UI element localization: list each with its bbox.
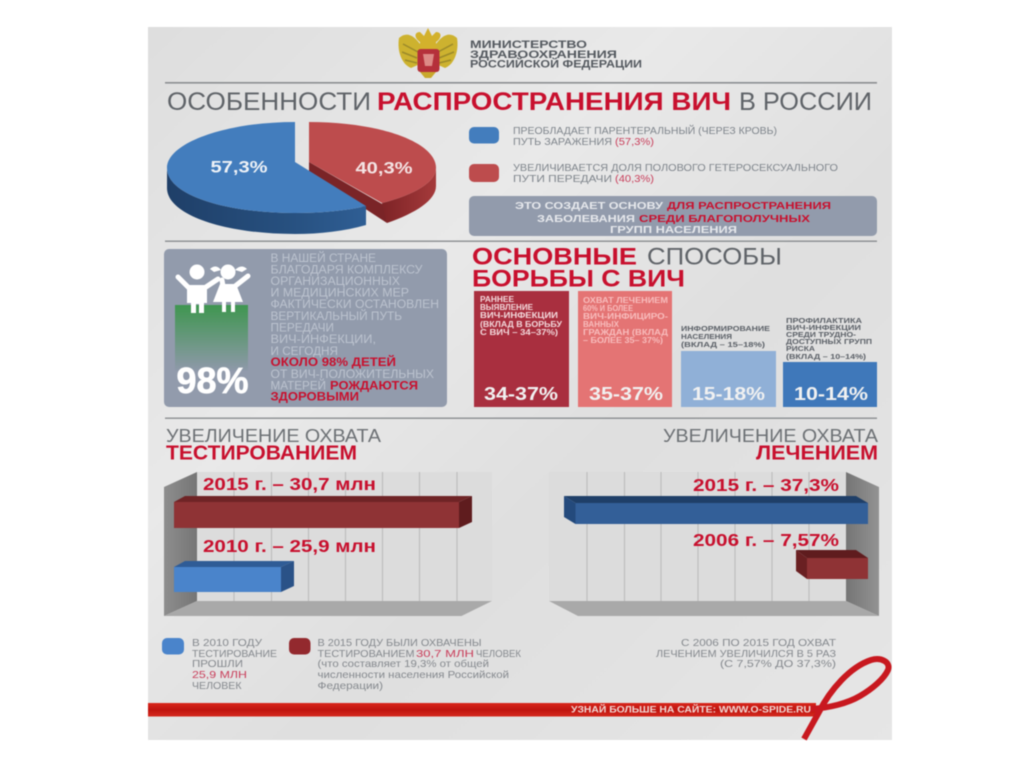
heading: testing coverage — [166, 425, 382, 464]
legend: blue: ПРЕОБЛАДАЕТ ПАРЕНТЕРАЛЬНЫЙ (ЧЕРЕЗ КРОВЬ) — [513, 124, 777, 137]
chart: treatment coverage — [549, 472, 879, 616]
legend: red: ПУТИ ПЕРЕДАЧИ — [513, 174, 612, 185]
bar: informing the public: НАСЕЛЕНИЯ — [681, 332, 732, 341]
note: 2015 testing — [289, 637, 522, 692]
bar: early detection — [474, 291, 569, 407]
heading: main ways of fighting HIV: ОСНОВНЫЕ — [472, 244, 637, 270]
panel text: И МЕДИЦИНСКИХ МЕР — [270, 288, 409, 300]
site link: УЗНАЙ БОЛЬШЕ НА САЙТЕ: WWW.O-SPIDE.RU — [571, 704, 811, 714]
bar: 2010 testing — [174, 561, 294, 592]
note: 2010 testing: ПРОШЛИ — [192, 658, 243, 670]
ministry name: РОССИЙСКОЙ ФЕДЕРАЦИИ — [470, 58, 642, 70]
ministry name: ЗДРАВООХРАНЕНИЯ — [470, 49, 617, 61]
heading: main ways of fighting HIV: БОРЬБЫ С ВИЧ — [472, 266, 685, 292]
bar: prevention — [783, 316, 877, 407]
panel text: ОКОЛО 98% ДЕТЕЙ — [270, 356, 396, 369]
icon: two children — [178, 264, 248, 313]
bar: prevention: ДОСТУПНЫХ ГРУПП — [786, 337, 872, 346]
legend: red — [469, 163, 838, 185]
callout: conclusion box: ЗАБОЛЕВАНИЯ — [537, 213, 635, 225]
legend: red: УВЕЛИЧИВАЕТСЯ ДОЛЯ ПОЛОВОГО ГЕТЕРОСЕКСУАЛЬНОГО — [513, 163, 838, 174]
bar: prevention: 10-14% — [794, 384, 868, 404]
heading: treatment coverage: УВЕЛИЧЕНИЕ ОХВАТА — [663, 425, 879, 446]
heading: main ways of fighting HIV — [472, 244, 782, 292]
panel text: И СЕГОДНЯ — [270, 346, 338, 358]
panel text: ЗДОРОВЫМИ — [270, 392, 359, 404]
bar: early detection: (ВКЛАД В БОРЬБУ — [480, 320, 563, 329]
panel: infographic background — [148, 27, 892, 740]
callout: conclusion box: ДЛЯ РАСПРОСТРАНЕНИЯ — [667, 200, 831, 212]
bar: early detection: 34-37% — [484, 384, 558, 404]
label: 57,3%: 57,3% — [210, 158, 268, 176]
panel text: В НАШЕЙ СТРАНЕ — [270, 252, 376, 265]
title — [167, 88, 872, 116]
bar: prevention: РИСКА — [786, 344, 816, 353]
callout: conclusion box: СРЕДИ БЛАГОПОЛУЧНЫХ — [639, 213, 810, 225]
bar: informing the public — [681, 324, 776, 407]
bar: treatment coverage: – БОЛЕЕ 35– 37%) — [583, 336, 663, 345]
note: treatment growth: ЛЕЧЕНИЕМ УВЕЛИЧИЛСЯ В 5 РАЗ — [656, 648, 836, 660]
label: 2015 testing: 2015 г. – 30,7 млн — [203, 474, 376, 494]
ministry name: МИНИСТЕРСТВО — [470, 39, 588, 51]
bar: treatment coverage — [578, 291, 672, 407]
note: 2010 testing: 25,9 МЛН — [192, 669, 247, 681]
legend: blue: ПУТЬ ЗАРАЖЕНИЯ — [513, 137, 612, 148]
note: 2010 testing: В 2010 ГОДУ — [192, 637, 262, 649]
bar: treatment coverage: ВИЧ-ИНФИЦИРО- — [583, 312, 668, 321]
note: 2010 testing — [162, 637, 277, 692]
bar: treatment coverage: ВАННЫХ — [583, 320, 620, 329]
title: В РОССИИ — [739, 88, 872, 116]
bar: treatment coverage: ГРАЖДАН (ВКЛАД — [583, 328, 668, 337]
pie chart — [167, 122, 436, 234]
bar: early detection: РАННЕЕ — [480, 295, 515, 304]
bar: prevention: ПРОФИЛАКТИКА — [786, 316, 863, 325]
legend: blue — [469, 124, 777, 148]
panel text: ОТ ВИЧ-ПОЛОЖИТЕЛЬНЫХ — [270, 369, 434, 381]
panel text: РОЖДАЮТСЯ — [330, 380, 418, 392]
callout: conclusion box: ГРУПП НАСЕЛЕНИЯ — [610, 224, 737, 236]
bar: prevention: (ВКЛАД – 10–14%) — [786, 352, 867, 361]
panel text: ВИЧ-ИНФЕКЦИИ, — [270, 334, 376, 346]
note: 2015 testing: Федерации) — [318, 680, 383, 692]
bar: 2015 testing — [174, 496, 472, 528]
label: 2010 testing: 2010 г. – 25,9 млн — [203, 536, 376, 556]
legend: red: (40,3%) — [615, 174, 654, 185]
panel text — [270, 252, 439, 404]
bar: informing the public: (ВКЛАД – 15–18%) — [681, 340, 766, 349]
bar: informing the public: ИНФОРМИРОВАНИЕ — [681, 324, 770, 333]
icon: state emblem — [398, 28, 458, 78]
label: 40,3%: 40,3% — [356, 158, 412, 178]
heading: treatment coverage — [663, 425, 879, 464]
heading: testing coverage: ТЕСТИРОВАНИЕМ — [166, 442, 357, 464]
panel text: МАТЕРЕЙ — [270, 380, 326, 392]
title: ОСОБЕННОСТИ — [167, 88, 371, 116]
icon: red ribbon with site link — [148, 659, 889, 739]
callout: conclusion box: ЭТО СОЗДАЕТ ОСНОВУ — [515, 200, 664, 212]
note: 2015 testing: В 2015 ГОДУ БЫЛИ ОХВАЧЕНЫ — [318, 637, 482, 649]
panel: 98% of children — [164, 249, 447, 407]
note: 2015 testing: (что составляет 19,3% от общей — [318, 658, 489, 670]
bar: treatment coverage: ОХВАТ ЛЕЧЕНИЕМ — [583, 296, 668, 305]
note: 2015 testing: ТЕСТИРОВАНИЕМ — [318, 648, 414, 660]
heading: treatment coverage: ЛЕЧЕНИЕМ — [756, 442, 878, 464]
98% figure: 98% — [176, 360, 248, 401]
legend: blue: (57,3%) — [615, 137, 654, 148]
bar: early detection: С ВИЧ – 34–37%) — [480, 328, 558, 337]
green gradient bar — [175, 305, 248, 371]
note: treatment growth — [656, 637, 837, 670]
callout: conclusion box — [469, 196, 877, 236]
bar: treatment coverage: 35-37% — [589, 384, 663, 404]
panel text: ФАКТИЧЕСКИ ОСТАНОВЛЕН — [270, 299, 439, 311]
panel text: БЛАГОДАРЯ КОМПЛЕКСУ — [270, 264, 423, 276]
panel text: ПЕРЕДАЧИ — [270, 322, 334, 334]
label: 2015 treatment: 2015 г. – 37,3% — [693, 475, 840, 495]
bar: prevention: ВИЧ-ИНФЕКЦИИ — [786, 323, 861, 332]
heading: testing coverage: УВЕЛИЧЕНИЕ ОХВАТА — [166, 425, 382, 446]
note: treatment growth: (С 7,57% ДО 37,3%) — [720, 658, 836, 670]
chart: testing coverage — [164, 472, 492, 616]
bar: early detection: ВИЧ-ИНФЕКЦИИ — [480, 311, 558, 320]
ministry name — [470, 39, 642, 70]
panel text: ВЕРТИКАЛЬНЫЙ ПУТЬ — [270, 310, 402, 323]
heading: main ways of fighting HIV: СПОСОБЫ — [647, 244, 782, 270]
bar: 2006 treatment — [796, 550, 868, 579]
panel text: ОРГАНИЗАЦИОННЫХ — [270, 276, 400, 288]
note: 2015 testing: 30,7 МЛН — [416, 648, 474, 660]
note: 2015 testing: ЧЕЛОВЕК — [476, 648, 522, 660]
note: 2010 testing: ЧЕЛОВЕК — [192, 680, 242, 692]
note: treatment growth: С 2006 ПО 2015 ГОД ОХВАТ — [681, 637, 837, 649]
title: РАСПРОСТРАНЕНИЯ ВИЧ — [377, 88, 731, 116]
label: 2006 treatment: 2006 г. – 7,57% — [693, 530, 840, 550]
note: 2010 testing: ТЕСТИРОВАНИЕ — [192, 648, 277, 660]
bar: informing the public: 15-18% — [692, 384, 765, 404]
bar: prevention: СРЕДИ ТРУДНО- — [786, 330, 857, 339]
bar: early detection: ВЫЯВЛЕНИЕ — [480, 303, 534, 312]
bar: 2015 treatment — [564, 496, 868, 524]
bar: treatment coverage: 60% И БОЛЕЕ — [583, 304, 634, 313]
note: 2015 testing: численности населения Российской — [318, 669, 509, 681]
